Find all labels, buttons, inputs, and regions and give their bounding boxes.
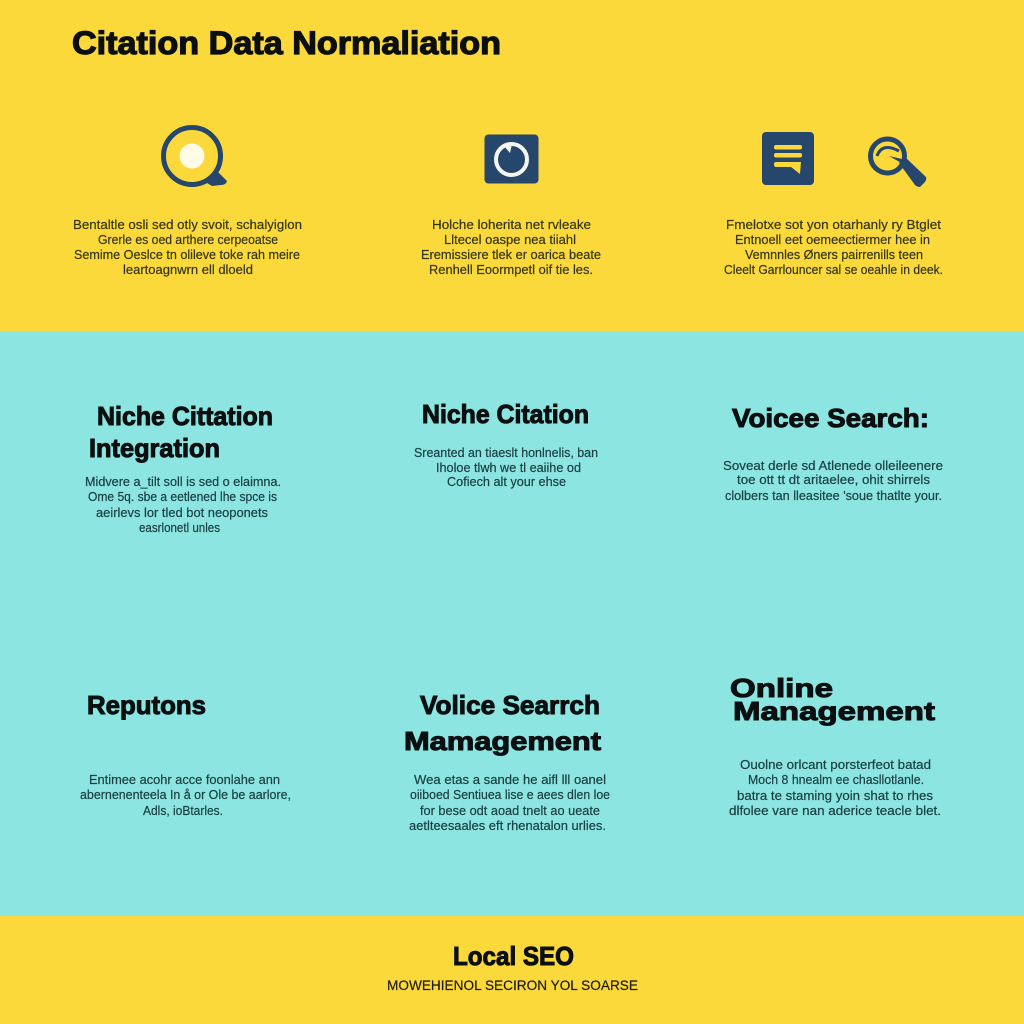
heading: Niche Citation bbox=[422, 399, 589, 429]
heading: Mamagement bbox=[404, 726, 601, 756]
body text: batra te staming yoin shat to rhes bbox=[737, 788, 933, 803]
body text: Soveat derle sd Atlenede olleileenere bbox=[723, 458, 943, 473]
text block: column 1 description: Bentaltle osli sed otly svoit, schalyiglon bbox=[73, 217, 302, 232]
text block: column 2 description: Eremissiere tlek er oarica beate bbox=[421, 247, 601, 262]
body text: Adls, ioBtarles. bbox=[143, 803, 223, 818]
body text: easrlonetl unles bbox=[139, 520, 220, 535]
card: Volice Searrch Mamagement bbox=[404, 690, 610, 833]
text block: column 2 description: Renhell Eoormpetl oif tie les. bbox=[429, 262, 593, 277]
body text: clolbers tan lleasitee 'soue thatlte your. bbox=[725, 488, 942, 503]
panel: teal middle band bbox=[0, 331, 1024, 916]
text block: column 3 description bbox=[724, 217, 943, 277]
heading: Reputons bbox=[87, 690, 206, 720]
text block: column 3 description: Fmelotxe sot yon otarhanly ry Btglet bbox=[726, 217, 941, 232]
heading: Online bbox=[730, 673, 833, 703]
text block: column 1 description: leartoagnwrn ell dloeld bbox=[123, 262, 253, 277]
text block: column 3 description: Vemnnles Øners pairrenills teen bbox=[745, 247, 923, 262]
footer heading: Local SEO bbox=[453, 941, 574, 971]
footer bbox=[387, 941, 638, 993]
heading: Management bbox=[733, 696, 935, 726]
body text: Entimee acohr acce foonlahe ann bbox=[89, 772, 280, 787]
body text: Midvere a_tilt soll is sed o elaimna. bbox=[85, 474, 281, 489]
body text: toe ott tt dt aritaelee, ohit shirrels bbox=[737, 472, 930, 487]
heading: Volice Searrch bbox=[420, 690, 600, 720]
card: Online Management bbox=[729, 673, 941, 818]
text block: column 1 description: Grerle es oed arthere cerpeoatse bbox=[98, 232, 278, 247]
body text bbox=[80, 772, 291, 818]
heading: Voicee Search: bbox=[732, 403, 929, 433]
text block: column 3 description: Cleelt Garrlouncer sal se oeahle in deek. bbox=[724, 262, 943, 277]
heading bbox=[404, 690, 601, 756]
panel: bottom yellow band bbox=[0, 916, 1024, 1024]
body text: Moch 8 hnealm ee chasllotlanle. bbox=[748, 772, 924, 787]
text block: column 2 description: Lltecel oaspe nea tiiahl bbox=[444, 232, 576, 247]
body text: aetlteesaales eft rhenatalon urlies. bbox=[409, 818, 606, 833]
icon: magnifying glass bbox=[870, 139, 926, 187]
text block: column 1 description bbox=[73, 217, 302, 277]
text block: column 2 description: Holche loherita net rvleake bbox=[432, 217, 591, 232]
body text: abernenenteela In å or Ole be aarlore, bbox=[80, 787, 291, 802]
card: Niche Citation bbox=[414, 399, 598, 489]
text block: column 2 description bbox=[421, 217, 601, 277]
heading: Integration bbox=[89, 433, 220, 463]
heading bbox=[730, 673, 935, 726]
body text bbox=[409, 772, 610, 833]
icon: circle magnifier bbox=[164, 128, 227, 186]
text block: column 3 description: Entnoell eet oemeectiermer hee in bbox=[735, 232, 930, 247]
body text: Ome 5q. sbe a eetlened lhe spce is bbox=[88, 489, 277, 504]
heading: Niche Cittation bbox=[97, 401, 273, 431]
icon: document with speech lines bbox=[762, 132, 814, 185]
title: Citation Data Normaliation bbox=[72, 25, 501, 61]
body text: Ouolne orlcant porsterfeot batad bbox=[740, 757, 931, 772]
body text: oiiboed Sentiuea lise e aees dlen loe bbox=[410, 787, 610, 802]
body text bbox=[414, 445, 598, 489]
body text: Sreanted an tiaeslt honlnelis, ban bbox=[414, 445, 598, 460]
body text bbox=[85, 474, 281, 535]
footer subtitle: MOWEHIENOL SECIRON YOL SOARSE bbox=[387, 977, 638, 993]
body text: Cofiech alt your ehse bbox=[447, 474, 566, 489]
body text: dlfolee vare nan aderice teacle blet. bbox=[729, 803, 941, 818]
body text bbox=[723, 458, 943, 503]
icon: navy square with ring bbox=[484, 134, 538, 184]
card: Niche Cittation Integration bbox=[85, 401, 281, 535]
card: Reputons bbox=[80, 690, 291, 818]
body text: aeirlevs lor tled bot neoponets bbox=[96, 505, 268, 520]
body text: Iholoe tlwh we tl eaiihe od bbox=[436, 460, 581, 475]
card: Voicee Search bbox=[723, 403, 943, 503]
heading bbox=[89, 401, 273, 463]
panel: top yellow band bbox=[0, 0, 1024, 331]
body text bbox=[729, 757, 941, 818]
body text: Wea etas a sande he aifl lll oanel bbox=[414, 772, 606, 787]
text block: column 1 description: Semime Oeslce tn olileve toke rah meire bbox=[74, 247, 300, 262]
body text: for bese odt aoad tnelt ao ueate bbox=[420, 803, 600, 818]
